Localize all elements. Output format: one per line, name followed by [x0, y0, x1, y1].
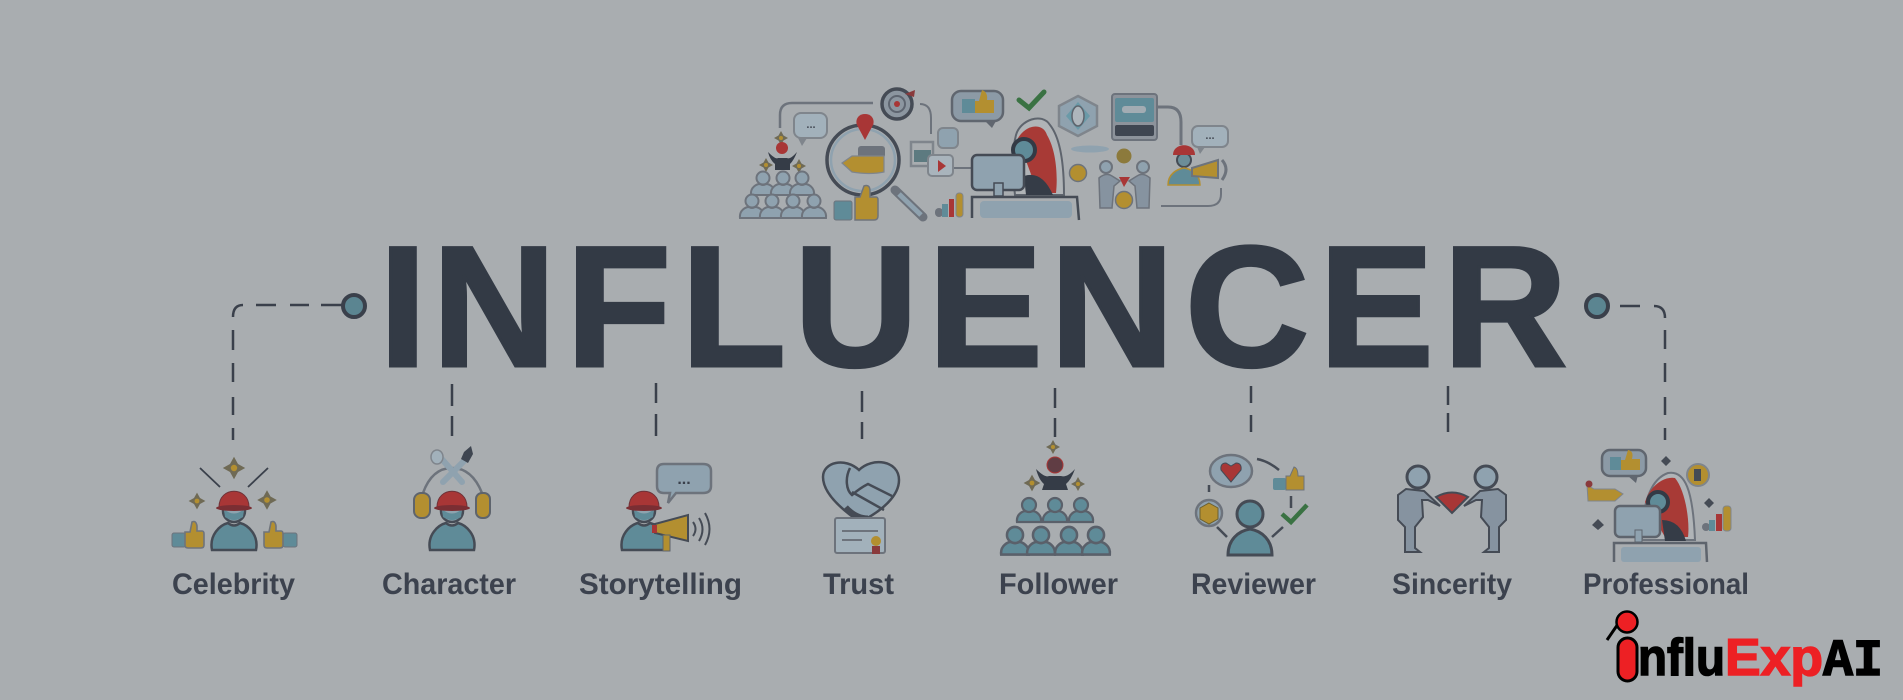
icon: audience pyramid: ... — [806, 119, 816, 131]
labels: Trust — [823, 568, 894, 601]
icon: media cards — [911, 128, 972, 176]
icon: celebrity — [172, 457, 297, 550]
logo: influExpAI — [1607, 612, 1883, 691]
icon: trust — [823, 462, 899, 554]
icon: audience pyramid — [740, 103, 873, 218]
icon: tape device — [1112, 94, 1181, 145]
icon: target — [882, 89, 931, 134]
icon: thumb speech bubble — [952, 90, 1003, 128]
labels: Sincerity — [1392, 568, 1512, 601]
dashed connectors — [233, 295, 1665, 440]
top illustration cluster — [740, 89, 1228, 220]
icon: speaker with megaphone: ... — [1205, 130, 1215, 142]
labels: Follower — [999, 568, 1118, 601]
logo: influExpAI: nflu — [1638, 629, 1725, 687]
icon: follower pyramid — [1001, 440, 1110, 555]
icon: character — [414, 446, 490, 550]
icon: storytelling — [621, 464, 711, 551]
logo: influExpAI: Exp — [1725, 629, 1823, 687]
labels: Character — [382, 568, 516, 601]
icon: creator at desk — [972, 118, 1079, 220]
labels: Storytelling — [579, 568, 742, 601]
icon: check mark — [1019, 92, 1044, 108]
icon: speaker with megaphone — [1161, 126, 1228, 206]
icon: reviewer — [1196, 455, 1307, 555]
labels: Professional — [1583, 568, 1749, 601]
icon: magnifier with pin and thumb — [827, 114, 923, 220]
labels: Reviewer — [1191, 568, 1316, 601]
icon: bar chart — [935, 193, 963, 217]
logo: influExpAI: i — [1617, 630, 1637, 688]
labels — [172, 568, 1749, 601]
title: INFLUENCER: INFLUENCER — [379, 211, 1567, 403]
icon: professional — [1586, 450, 1731, 562]
icon: hexagon mouse — [1059, 96, 1097, 136]
logo: influExpAI: AI — [1823, 632, 1883, 691]
labels: Celebrity — [172, 568, 295, 601]
icon: sincerity — [1398, 466, 1506, 552]
icon: exchange and coins — [1070, 146, 1150, 208]
icon: storytelling: ... — [677, 471, 691, 488]
